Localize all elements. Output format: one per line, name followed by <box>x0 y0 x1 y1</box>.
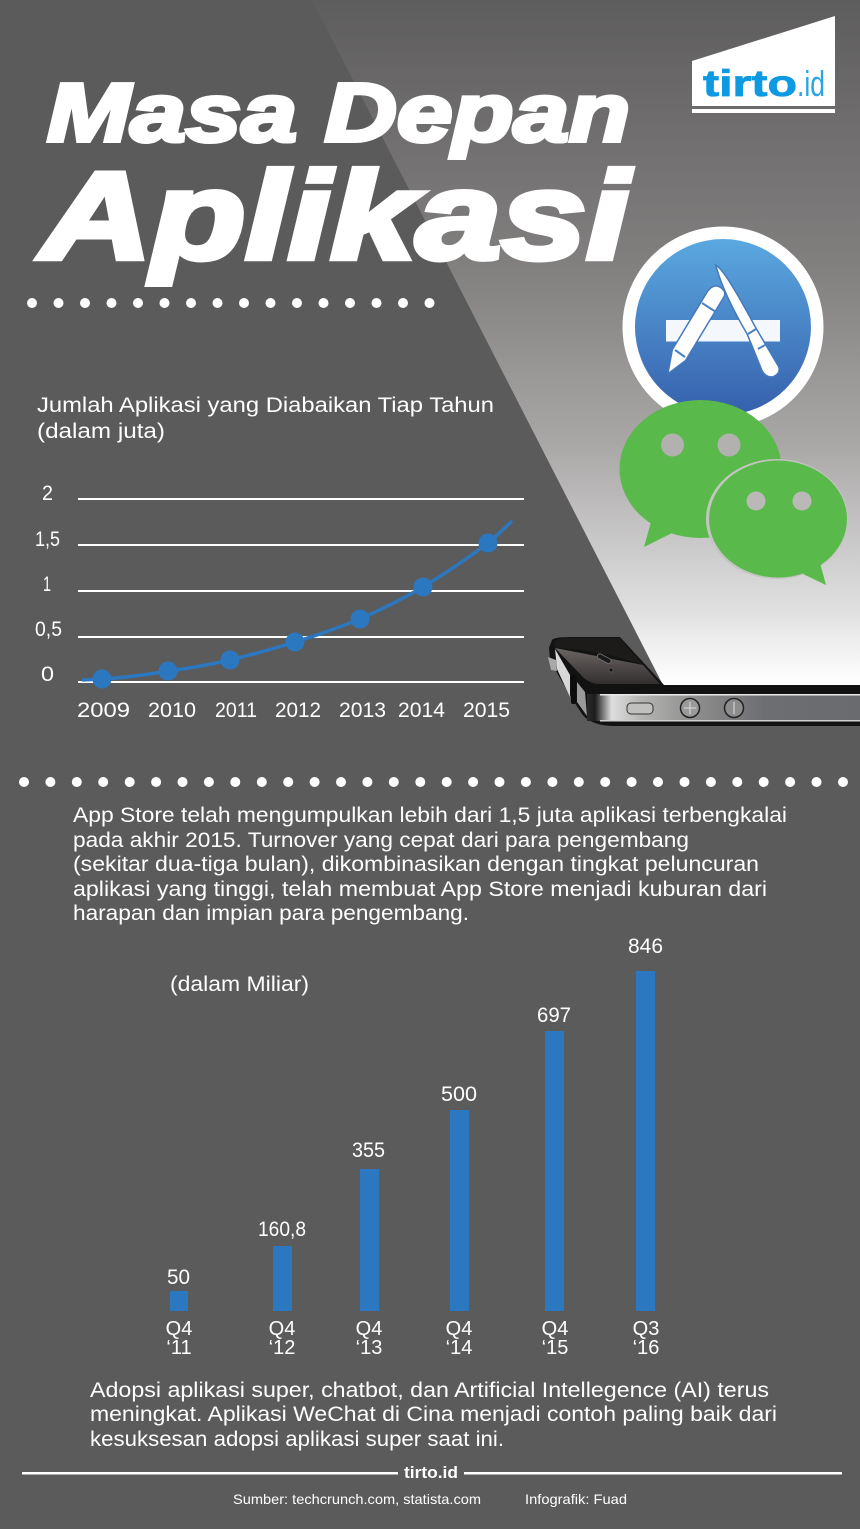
line chart: 2014 <box>398 699 445 722</box>
bar chart: 846 <box>628 935 663 958</box>
paragraph: super apps: Adopsi aplikasi super, chatbot, dan Artificial Intellegence (AI) terus <box>90 1379 769 1402</box>
line chart: 2013 <box>339 699 386 722</box>
paragraph: app store: pada akhir 2015. Turnover yang cepat dari para pengembang <box>73 829 689 852</box>
bar chart: 500 <box>441 1083 477 1106</box>
line chart: 2015 <box>463 699 510 722</box>
line chart: 0 <box>41 663 54 686</box>
bar chart: ‘12 <box>269 1337 295 1359</box>
dotted divider top <box>27 298 434 308</box>
bar chart: ‘14 <box>446 1337 472 1359</box>
bar chart: 160,8 <box>258 1218 306 1241</box>
paragraph: super apps: meningkat. Aplikasi WeChat di Cina menjadi contoh paling baik dari <box>90 1403 777 1426</box>
bar chart <box>166 935 663 1359</box>
line chart: 2 <box>42 482 53 505</box>
icon: app store <box>622 226 824 428</box>
paragraph: app store: aplikasi yang tinggi, telah membuat App Store menjadi kuburan dari <box>73 878 767 901</box>
logo: tirto.id: tirto <box>703 63 797 104</box>
paragraph: app store: (sekitar dua-tiga bulan), dikombinasikan dengan tingkat peluncuran <box>73 853 759 876</box>
chart title: Jumlah Aplikasi yang Diabaikan Tiap Tahun <box>37 394 494 417</box>
logo: tirto.id: .id <box>797 63 825 104</box>
bar chart: Q4 <box>166 1318 192 1340</box>
paragraph: app store <box>73 804 787 925</box>
line chart: 2012 <box>275 699 321 722</box>
title: Aplikasi <box>37 148 632 286</box>
bar chart: Q4 <box>356 1318 382 1340</box>
paragraph: app store: harapan dan impian para pengembang. <box>73 902 469 925</box>
bar chart: ‘13 <box>356 1337 382 1359</box>
line chart: 0,5 <box>35 618 62 641</box>
footer <box>22 1463 842 1507</box>
icon: wechat <box>620 400 848 585</box>
bar chart: (dalam Miliar) <box>170 973 309 996</box>
bar chart: 355 <box>352 1139 385 1162</box>
paragraph: super apps: kesuksesan adopsi aplikasi super saat ini. <box>90 1428 504 1451</box>
light beam from phone <box>312 0 860 685</box>
title <box>37 66 632 286</box>
bar chart: 697 <box>537 1004 571 1027</box>
paragraph: app store: App Store telah mengumpulkan lebih dari 1,5 juta aplikasi terbengkalai <box>73 804 787 827</box>
dotted divider middle <box>19 777 848 787</box>
chart title <box>37 394 494 443</box>
line chart: 2010 <box>148 699 196 722</box>
footer: Infografik: Fuad <box>525 1491 627 1507</box>
line chart: 2009 <box>77 699 130 722</box>
phone <box>548 637 860 726</box>
bar chart: ‘16 <box>633 1337 659 1359</box>
bar chart: ‘11 <box>166 1337 192 1359</box>
bar chart: Q4 <box>269 1318 295 1340</box>
line chart <box>35 482 524 722</box>
title: Masa Depan <box>47 66 630 159</box>
chart title: (dalam juta) <box>37 420 165 443</box>
paragraph: super apps <box>90 1379 777 1451</box>
bar chart: Q3 <box>633 1318 659 1340</box>
bar chart: Q4 <box>542 1318 568 1340</box>
line chart: 1,5 <box>35 528 60 551</box>
bar chart: ‘15 <box>542 1337 568 1359</box>
bar chart: Q4 <box>446 1318 472 1340</box>
line chart: 1 <box>43 573 51 596</box>
line chart: 2011 <box>215 699 257 722</box>
bar chart: 50 <box>167 1266 190 1289</box>
footer: tirto.id <box>404 1463 458 1482</box>
logo: tirto.id <box>692 16 835 113</box>
footer: Sumber: techcrunch.com, statista.com <box>233 1491 481 1507</box>
